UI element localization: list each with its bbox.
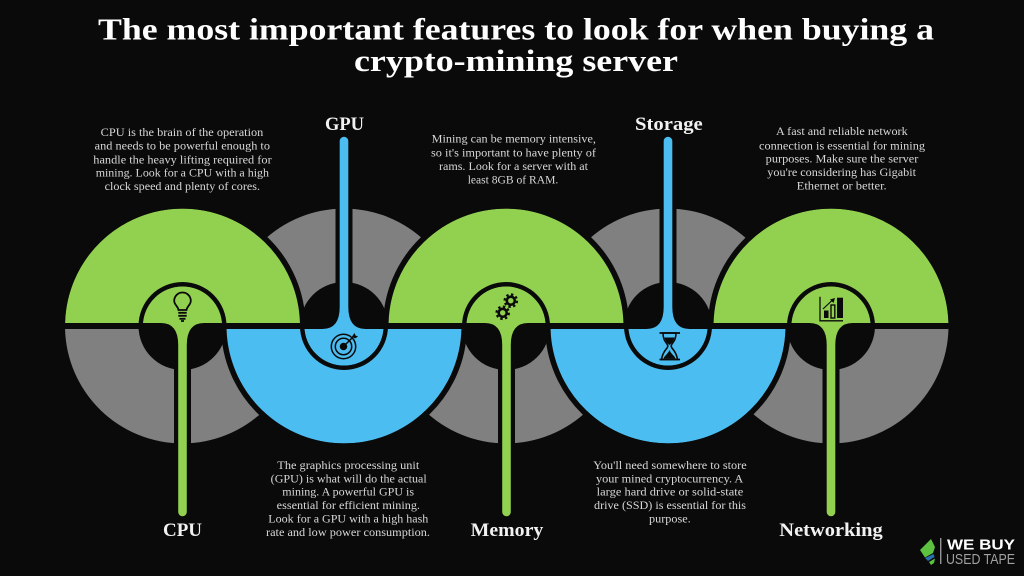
panel: Storage blue arc	[551, 329, 785, 443]
text: Storage description: drive (SSD) is essential for this	[594, 498, 746, 512]
heading: Storage: Storage	[635, 115, 703, 135]
icon: target with arrow	[331, 333, 358, 359]
text: GPU description: The graphics processing unit	[277, 458, 420, 472]
text: CPU description: handle the heavy lifting required for	[93, 152, 272, 166]
icon: gears	[496, 294, 517, 319]
text: Networking description: you're considering has Gigabit	[767, 165, 917, 179]
text: Memory description: least 8GB of RAM.	[468, 172, 558, 186]
logo: We Buy Used Tape: WE BUY	[947, 538, 1015, 554]
heading: CPU: CPU	[163, 521, 202, 541]
hub: GPU blue core and stem	[305, 137, 383, 365]
center band	[0, 323, 1024, 329]
icon: light bulb	[174, 292, 191, 321]
hub: CPU green core and stem	[143, 287, 222, 516]
text: Memory description: so it's important to have plenty of	[431, 146, 596, 160]
panel: Networking green arc	[714, 209, 948, 323]
text: Memory description: Mining can be memory intensive,	[432, 132, 596, 146]
text: CPU description	[93, 125, 272, 193]
text: GPU description: essential for efficient mining.	[277, 498, 420, 512]
heading: Networking: Networking	[779, 521, 884, 541]
text: CPU description: CPU is the brain of the operation	[101, 125, 263, 139]
heading: GPU: GPU	[325, 115, 364, 135]
text: Memory description	[431, 132, 596, 186]
text: CPU description: and needs to be powerful enough to	[95, 138, 270, 152]
title: The most important features to look for when buying a	[98, 11, 935, 46]
text: Networking description: A fast and reliable network	[776, 124, 908, 138]
chart: stem outlines and hubs	[138, 190, 875, 456]
panel: CPU green arc	[65, 209, 300, 323]
text: CPU description: clock speed and plenty of cores.	[105, 179, 260, 193]
text: Storage description: purpose.	[649, 512, 691, 526]
text: GPU description: mining. A powerful GPU is	[282, 485, 414, 499]
panel: Memory green arc	[389, 209, 623, 323]
text: Storage description: your mined cryptocurrency. A	[596, 471, 744, 485]
panel: GPU blue arc	[227, 329, 461, 443]
text: Networking description	[759, 124, 925, 192]
hub: Storage blue core and stem	[629, 137, 707, 365]
chart: arc outlines	[62, 206, 951, 446]
logo: We Buy Used Tape	[920, 538, 1015, 568]
text: CPU description: mining. Look for a CPU with a high	[96, 166, 269, 180]
text: Networking description: purposes. Make sure the server	[766, 152, 918, 166]
title: crypto-mining server	[354, 43, 678, 78]
text: Memory description: rams. Look for a server with at	[439, 159, 589, 173]
text: Networking description: connection is essential for mining	[759, 138, 925, 152]
text: Networking description: Ethernet or better.	[797, 178, 887, 192]
text: GPU description: (GPU) is what will do the actual	[271, 471, 427, 485]
icon: bar chart with arrow	[820, 297, 843, 321]
text: Storage description	[593, 458, 747, 526]
text: GPU description: Look for a GPU with a high hash	[268, 512, 428, 526]
chart: gray background arcs	[65, 209, 948, 443]
icon: hourglass	[660, 333, 680, 360]
hub: Memory green core and stem	[467, 287, 545, 516]
chart: hub rings	[138, 282, 875, 370]
text: Storage description: You'll need somewhere to store	[593, 458, 747, 472]
hub: Networking green core and stem	[792, 287, 870, 516]
text: Storage description: large hard drive or solid-state	[597, 485, 743, 499]
heading: Memory: Memory	[471, 521, 544, 541]
text: GPU description: rate and low power consumption.	[266, 525, 430, 539]
text: GPU description	[266, 458, 430, 539]
title	[98, 11, 935, 78]
